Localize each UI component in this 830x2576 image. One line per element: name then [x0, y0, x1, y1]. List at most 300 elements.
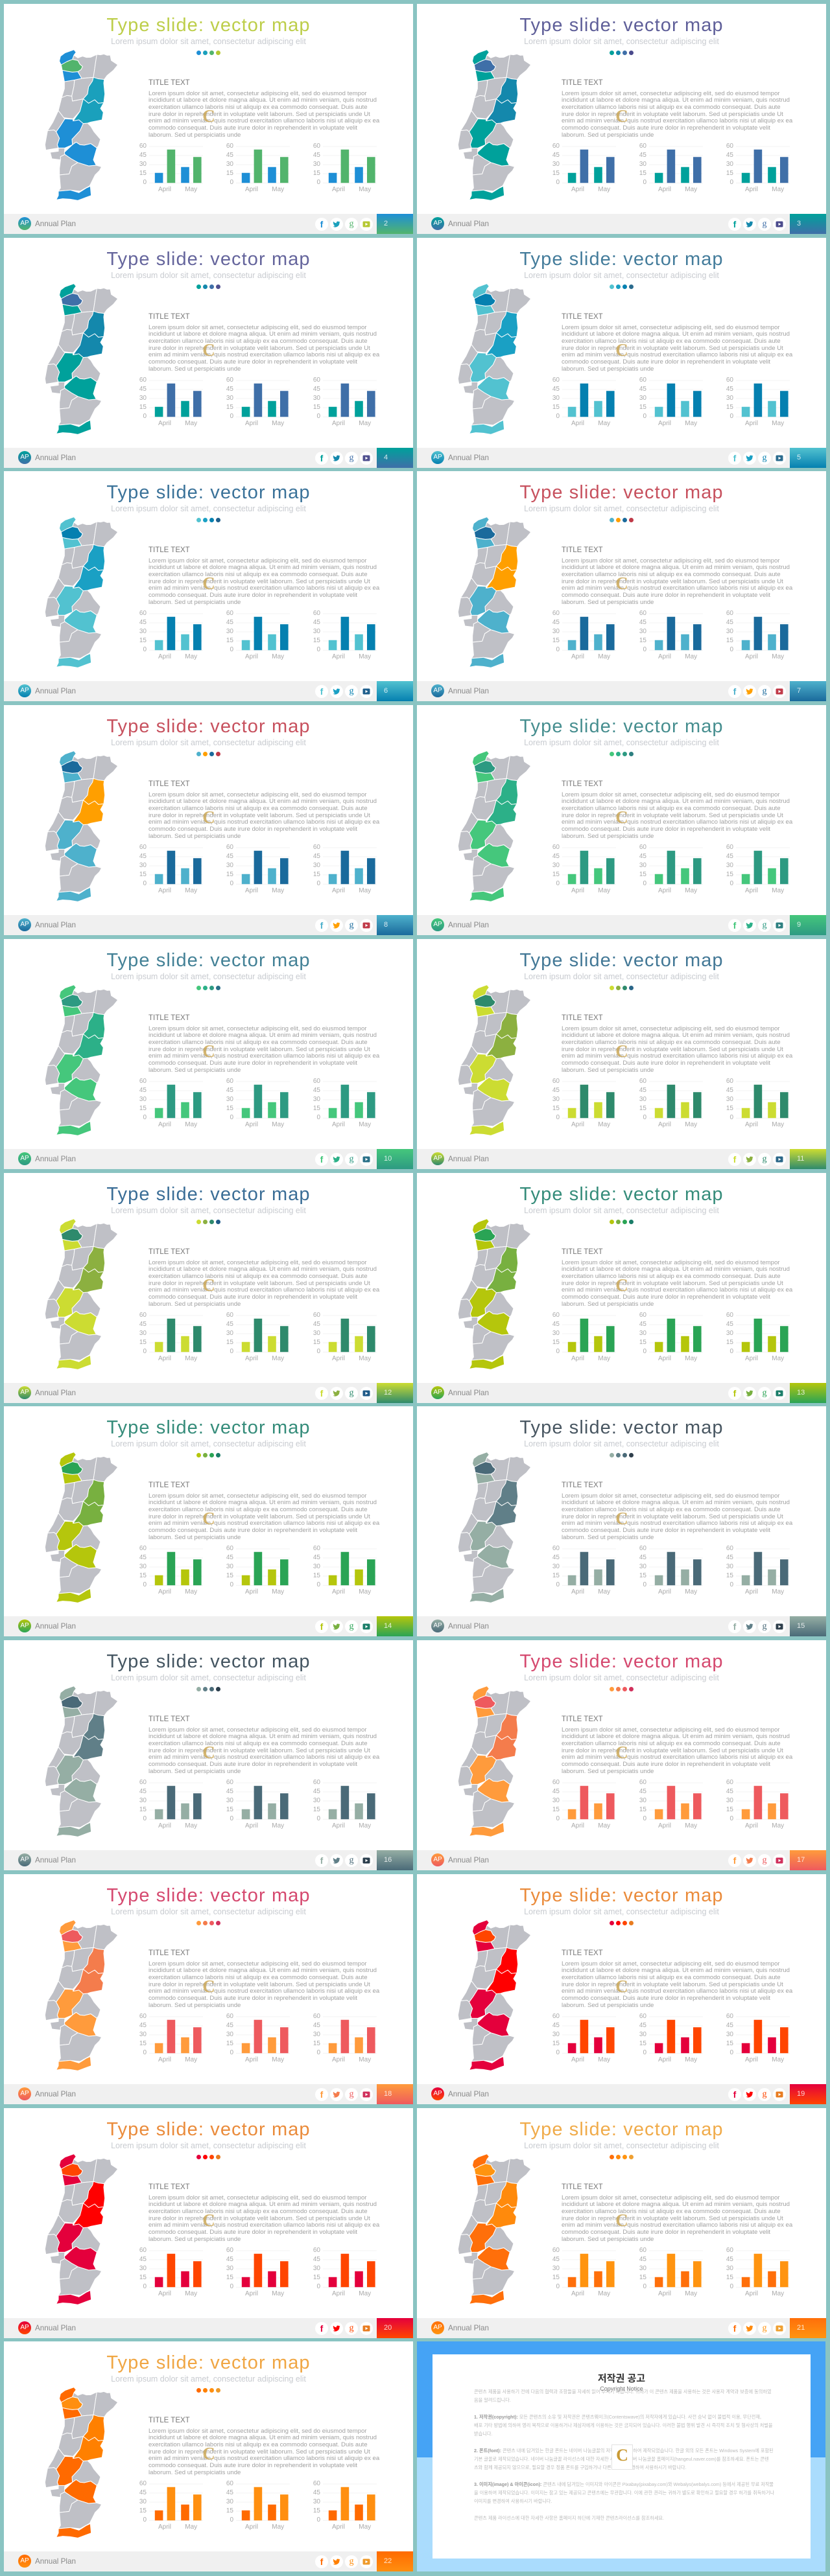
icon: twitter: [330, 2088, 343, 2101]
bar chart 3: April: [332, 420, 345, 427]
icon: facebook: [728, 685, 741, 698]
bar chart 3: 30: [313, 1797, 320, 1804]
logo: [18, 2087, 31, 2100]
bar chart 1: May: [185, 420, 197, 427]
subtitle: Lorem ipsum dolor sit amet, consectetur adipiscing elit: [111, 972, 306, 981]
icon: google: [345, 685, 358, 698]
icon: facebook: f: [733, 1855, 736, 1866]
icon: twitter: [330, 685, 343, 698]
body text: commodo consequat. Duis aute irure dolor in reprehenderit in voluptate velit: [148, 1527, 357, 1534]
body text: exercitation ullamco laboris nisi ut aliquip ex ea commodo consequat. Duis aute: [562, 1506, 781, 1513]
icon: youtube: [773, 919, 786, 932]
dots: [610, 1687, 634, 1691]
bar chart 3: 60: [313, 1779, 320, 1786]
bar chart 3: May: [772, 653, 784, 660]
icon: google: [758, 685, 771, 698]
bar chart 3: [313, 1078, 384, 1130]
brand: Annual Plan: [35, 2090, 76, 2098]
body text: exercitation ullamco laboris nisi ut aliquip ex ea commodo consequat. Duis aute: [562, 104, 781, 111]
bar chart 1: [552, 143, 616, 193]
body text: incididunt ut labore et dolore magna aliqua. Ut enim ad minim veniam, quis nostrud: [148, 1266, 377, 1273]
bar chart 1: [139, 1545, 210, 1597]
bar chart 1: 60: [139, 2480, 147, 2487]
map: [439, 1909, 543, 2091]
text: image clause: 3. 이미지(image) & 아이콘(icon): 콘텐츠 내에 담겨있는 이미지와 아이콘은 Pixabay(pixabay.com)와 Webalys(webalys.com) 등에서 제공된 무료 저작물: [474, 2481, 774, 2487]
subtitle: Lorem ipsum dolor sit amet, consectetur adipiscing elit: [111, 1907, 306, 1916]
icon: youtube: [773, 2088, 786, 2101]
bar chart 1: 30: [552, 1330, 560, 1337]
title: Type slide: vector map: [519, 950, 724, 971]
bar chart 1: 60: [139, 1312, 147, 1319]
bar chart 1: 15: [552, 1806, 560, 1813]
body text: exercitation ullamco laboris nisi ut aliquip ex ea commodo consequat. Duis aute: [148, 805, 368, 812]
icon: google: g: [763, 2089, 766, 2099]
bar chart 2: 45: [226, 1788, 233, 1795]
heading: TITLE TEXT: [562, 313, 603, 321]
logo: AP: [433, 1155, 442, 1162]
icon: google: g: [763, 920, 766, 930]
body text: exercitation ullamco laboris nisi ut aliquip ex ea commodo consequat. Duis aute: [148, 1273, 368, 1280]
bar chart 2: 30: [226, 161, 233, 168]
subtitle: Lorem ipsum dolor sit amet, consectetur adipiscing elit: [524, 271, 719, 280]
page number: [377, 214, 413, 234]
bar chart 3: 45: [313, 1087, 320, 1094]
body text: irure dolor in reprehenderit in voluptate velit laborum. Sed ut perspiciatis unde Ut: [148, 1747, 370, 1754]
page number: 21: [797, 2324, 805, 2332]
bar chart 3: May: [359, 2290, 371, 2297]
bar chart 2: [639, 1545, 710, 1597]
bar chart 1: 45: [139, 1554, 147, 1561]
bar chart 3: 45: [726, 1554, 733, 1561]
bar chart 3: 30: [726, 2031, 733, 2038]
body text: incididunt ut labore et dolore magna aliqua. Ut enim ad minim veniam, quis nostrud: [562, 1733, 790, 1740]
bar chart 1: 0: [143, 1815, 147, 1822]
icon: facebook: f: [733, 219, 736, 229]
subtitle: Lorem ipsum dolor sit amet, consectetur adipiscing elit: [524, 1439, 719, 1448]
bar chart 1: [552, 1078, 623, 1130]
icon: facebook: f: [320, 1621, 323, 1632]
panel: slide 16: [4, 1640, 413, 1870]
bar chart 1: May: [185, 653, 197, 660]
bar chart 3: 0: [316, 2283, 320, 2290]
bar chart 1: 0: [556, 2283, 560, 2290]
bar chart 1: May: [185, 1588, 197, 1595]
bar chart 2: May: [685, 1121, 697, 1128]
bar chart 3: [313, 610, 384, 662]
icon: facebook: f: [320, 686, 323, 697]
body text: commodo consequat. Duis aute irure dolor in reprehenderit in voluptate velit: [562, 2229, 770, 2236]
bar chart 1: May: [598, 1355, 610, 1362]
bar chart 2: 45: [639, 853, 646, 860]
subtitle: Lorem ipsum dolor sit amet, consectetur adipiscing elit: [524, 1673, 719, 1682]
subtitle: Lorem ipsum dolor sit amet, consectetur adipiscing elit: [111, 2374, 306, 2384]
icon: youtube: [773, 452, 786, 465]
bar chart 3: May: [772, 420, 784, 427]
bar chart 2: April: [658, 420, 671, 427]
bar chart 2: 15: [639, 170, 646, 177]
logo: AP: [433, 921, 442, 928]
icon: facebook: [728, 919, 741, 932]
text: intro: 콘텐츠 제품을 사용하기 전에 다음의 협력과 조항들을 자세히 읽어 주시기 바랍니다. 귀하가 이 콘텐츠 제품을 사용하는 것은 사용자 계약과 보증에 동의하였: [474, 2389, 772, 2395]
bar chart 1: [552, 1779, 623, 1831]
bar chart 3: [313, 2013, 384, 2065]
bar chart 2: 60: [639, 1312, 646, 1319]
bar chart 2: 30: [226, 2498, 233, 2505]
body text: laborum. Sed ut perspiciatis unde: [148, 1301, 241, 1308]
brand: Annual Plan: [35, 454, 76, 462]
bar chart 3: 15: [313, 1339, 320, 1346]
bar chart 1: May: [598, 186, 610, 193]
body text: laborum. Sed ut perspiciatis unde: [148, 2002, 241, 2009]
heading: TITLE TEXT: [148, 546, 190, 554]
watermark: C: [202, 1743, 215, 1762]
bar chart 1: April: [571, 653, 584, 660]
bar chart 1: 60: [139, 1545, 147, 1552]
bar chart 1: 60: [552, 2013, 560, 2020]
bar chart 1: 30: [552, 862, 560, 869]
bar chart 2: April: [658, 186, 671, 193]
subtitle: Lorem ipsum dolor sit amet, consectetur adipiscing elit: [111, 1673, 306, 1682]
brand: Annual Plan: [448, 454, 489, 462]
footer: [417, 1850, 826, 1870]
page number: 6: [384, 687, 388, 695]
watermark: C: [615, 574, 628, 593]
bar chart 3: April: [332, 186, 345, 193]
page number: 3: [797, 220, 801, 227]
icon: facebook: [315, 2322, 328, 2335]
bar chart 1: May: [185, 2290, 197, 2297]
bar chart 2: May: [685, 420, 697, 427]
bar chart 2: 15: [639, 1339, 646, 1346]
bar chart 2: [226, 610, 290, 660]
body text: incididunt ut labore et dolore magna aliqua. Ut enim ad minim veniam, quis nostrud: [148, 97, 377, 104]
bar chart 1: 30: [139, 628, 147, 635]
map: [439, 1675, 543, 1857]
logo: [18, 1152, 31, 1165]
bar chart 3: 15: [726, 1806, 733, 1813]
bar chart 1: April: [571, 1588, 584, 1595]
page number: [790, 681, 826, 701]
title: Type slide: vector map: [106, 2352, 311, 2373]
dots: [610, 752, 634, 756]
bar chart 1: May: [185, 1355, 197, 1362]
bar chart 2: 45: [639, 2022, 646, 2029]
body text: laborum. Sed ut perspiciatis unde: [562, 1768, 654, 1775]
bar chart 2: 0: [230, 2283, 233, 2290]
icon: twitter: [743, 1153, 756, 1166]
dots: [610, 51, 634, 55]
bar chart 2: 30: [639, 1330, 646, 1337]
logo: [18, 1619, 31, 1632]
page number: 14: [384, 1622, 392, 1630]
footer: [417, 2318, 826, 2338]
icon: facebook: [315, 919, 328, 932]
bar chart 3: May: [772, 1355, 784, 1362]
bar chart 3: 15: [313, 871, 320, 878]
bar chart 2: 60: [639, 377, 646, 384]
bar chart 1: 45: [139, 619, 147, 626]
bar chart 3: April: [745, 1355, 758, 1362]
map: [458, 284, 530, 434]
page number: [790, 915, 826, 935]
icon: google: [758, 1854, 771, 1867]
icon: youtube: [360, 1387, 373, 1400]
dots: [196, 1220, 220, 1224]
body text: incididunt ut labore et dolore magna aliqua. Ut enim ad minim veniam, quis nostrud: [148, 1032, 377, 1039]
bar chart 2: 60: [226, 1779, 233, 1786]
bar chart 2: 60: [226, 844, 233, 851]
logo: AP: [433, 687, 442, 694]
title: Type slide: vector map: [106, 715, 311, 736]
bar chart 3: 45: [313, 2256, 320, 2263]
bar chart 2: 0: [643, 1114, 646, 1121]
bar chart 1: 30: [552, 628, 560, 635]
icon: google: g: [349, 1855, 354, 1865]
bar chart 1: 45: [552, 2256, 560, 2263]
bar chart 3: [726, 1078, 797, 1130]
bar chart 1: 45: [139, 2489, 147, 2496]
bar chart 3: 30: [313, 1563, 320, 1570]
body text: enim ad minim veniam, quis nostrud exercitation ullamco laboris nisi ut aliquip ex ea: [562, 1520, 792, 1527]
logo: [431, 684, 444, 697]
bar chart 3: April: [745, 1822, 758, 1829]
logo: [431, 451, 444, 464]
bar chart 2: April: [658, 1822, 671, 1829]
dots: [196, 1921, 220, 1925]
bar chart 1: April: [158, 887, 171, 894]
body text: Lorem ipsum dolor sit amet, consectetur adipiscing elit, sed do eiusmod tempor: [562, 1492, 779, 1500]
icon: facebook: [728, 1153, 741, 1166]
bar chart 2: May: [272, 887, 284, 894]
bar chart 3: 0: [316, 2049, 320, 2056]
heading: TITLE TEXT: [148, 1949, 190, 1957]
icon: google: g: [349, 1621, 354, 1631]
body text: enim ad minim veniam, quis nostrud exercitation ullamco laboris nisi ut aliquip ex ea: [562, 117, 792, 124]
watermark: C: [202, 807, 215, 827]
body text: irure dolor in reprehenderit in voluptate velit laborum. Sed ut perspiciatis unde Ut: [562, 111, 783, 118]
bar chart 3: 30: [726, 1096, 733, 1103]
page number: 12: [384, 1389, 392, 1397]
heading: TITLE TEXT: [148, 2183, 190, 2191]
bar chart 1: 60: [552, 610, 560, 617]
body text: Lorem ipsum dolor sit amet, consectetur adipiscing elit, sed do eiusmod tempor: [148, 1960, 366, 1967]
bar chart 3: [726, 1779, 797, 1831]
bar chart 3: 15: [726, 2274, 733, 2281]
bar chart 2: May: [272, 2056, 284, 2063]
footer: [4, 2318, 413, 2338]
bar chart 2: 60: [639, 1078, 646, 1085]
panel: slide 6: [4, 471, 413, 701]
logo: AP: [433, 454, 442, 461]
bar chart 3: 60: [726, 1078, 733, 1085]
body text: enim ad minim veniam, quis nostrud exercitation ullamco laboris nisi ut aliquip ex ea: [148, 585, 379, 592]
map: [439, 974, 543, 1155]
bar chart 3: 60: [726, 2013, 733, 2020]
page number: [790, 2318, 826, 2338]
body text: irure dolor in reprehenderit in voluptate velit laborum. Sed ut perspiciatis unde Ut: [148, 1280, 370, 1287]
bar chart 1: May: [185, 1822, 197, 1829]
bar chart 2: April: [658, 1588, 671, 1595]
bar chart 1: 60: [552, 143, 560, 150]
bar chart 1: May: [598, 887, 610, 894]
subtitle: Lorem ipsum dolor sit amet, consectetur adipiscing elit: [524, 1206, 719, 1215]
bar chart 2: 15: [639, 871, 646, 878]
panel: slide 22: [4, 2341, 413, 2571]
bar chart 3: May: [359, 653, 371, 660]
page number: 9: [797, 921, 801, 929]
bar chart 2: 0: [230, 413, 233, 420]
icon: twitter: [743, 2322, 756, 2335]
body text: [562, 1493, 792, 1541]
bar chart 2: 0: [643, 1348, 646, 1355]
brand: Annual Plan: [448, 1622, 489, 1630]
bar chart 3: [313, 844, 384, 896]
icon: google: g: [349, 2089, 354, 2099]
body text: [562, 1961, 792, 2009]
bar chart 3: 0: [316, 1114, 320, 1121]
bar chart 1: 15: [139, 637, 147, 644]
logo: AP: [433, 2324, 442, 2331]
bar chart 3: 0: [729, 1114, 733, 1121]
icon: twitter: [330, 218, 343, 231]
bar chart 1: 15: [139, 2507, 147, 2514]
bar chart 3: 0: [316, 646, 320, 653]
page number: [377, 915, 413, 935]
bar chart 1: 60: [139, 2013, 147, 2020]
icon: facebook: f: [733, 920, 736, 931]
page number: 8: [384, 921, 388, 929]
bar chart 1: 30: [552, 2265, 560, 2272]
bar chart 1: 0: [143, 413, 147, 420]
bar chart 2: 0: [230, 646, 233, 653]
bar chart 1: 15: [552, 1339, 560, 1346]
body text: enim ad minim veniam, quis nostrud exercitation ullamco laboris nisi ut aliquip ex ea: [562, 1286, 792, 1294]
page number: [377, 2084, 413, 2104]
logo: AP: [20, 1622, 29, 1629]
body text: laborum. Sed ut perspiciatis unde: [148, 366, 241, 373]
bar chart 3: 60: [726, 1312, 733, 1319]
icon: google: g: [763, 1621, 766, 1631]
page number: 4: [384, 454, 388, 461]
bar chart 1: 45: [139, 853, 147, 860]
bar chart 3: 45: [726, 1321, 733, 1328]
bar chart 2: 0: [643, 1815, 646, 1822]
body text: Lorem ipsum dolor sit amet, consectetur adipiscing elit, sed do eiusmod tempor: [562, 2194, 779, 2201]
body text: laborum. Sed ut perspiciatis unde: [148, 1067, 241, 1074]
bar chart 2: [226, 143, 290, 193]
bar chart 1: April: [158, 1588, 171, 1595]
text: copyright clause: [474, 2413, 773, 2438]
page number: 19: [797, 2090, 805, 2098]
page number: 11: [797, 1155, 804, 1163]
bar chart 3: 30: [726, 395, 733, 402]
bar chart 1: May: [185, 887, 197, 894]
icon: google: g: [349, 219, 354, 229]
bar chart 2: [226, 2013, 297, 2065]
body text: enim ad minim veniam, quis nostrud exercitation ullamco laboris nisi ut aliquip ex ea: [562, 351, 792, 358]
body text: irure dolor in reprehenderit in voluptate velit laborum. Sed ut perspiciatis unde Ut: [148, 2448, 370, 2455]
watermark: C: [202, 574, 215, 593]
icon: youtube: [360, 1620, 373, 1633]
map: [439, 2143, 543, 2325]
bar chart 3: May: [359, 186, 371, 193]
heading: TITLE TEXT: [148, 1248, 190, 1256]
dots: [196, 1453, 220, 1457]
subtitle: Lorem ipsum dolor sit amet, consectetur adipiscing elit: [111, 738, 306, 747]
body text: Lorem ipsum dolor sit amet, consectetur adipiscing elit, sed do eiusmod tempor: [562, 1960, 779, 1967]
bar chart 1: [139, 610, 203, 660]
icon: twitter: [330, 1854, 343, 1867]
bar chart 3: May: [772, 186, 784, 193]
page number: [790, 1149, 826, 1169]
bar chart 1: [139, 1779, 210, 1831]
map: [439, 506, 543, 688]
bar chart 3: 30: [726, 1797, 733, 1804]
bar chart 2: 60: [226, 2013, 233, 2020]
bar chart 2: 30: [226, 395, 233, 402]
brand: Annual Plan: [35, 687, 76, 695]
text: copyright clause: 받습니다.: [474, 2431, 492, 2437]
icon: youtube: [773, 1387, 786, 1400]
bar chart 1: 15: [139, 404, 147, 411]
bar chart 1: 60: [139, 377, 147, 384]
icon: twitter: [330, 2555, 343, 2568]
title: Type slide: vector map: [106, 1183, 311, 1204]
map: [45, 50, 117, 200]
page number: [790, 1383, 826, 1403]
icon: youtube: [360, 452, 373, 465]
bar chart 1: 30: [552, 161, 560, 168]
bar chart 3: 60: [726, 143, 733, 150]
bar chart 2: [226, 377, 290, 427]
page number: [377, 448, 413, 468]
bar chart 3: 30: [313, 2031, 320, 2038]
bar chart 2: May: [272, 1121, 284, 1128]
map: [458, 50, 530, 200]
watermark: C: [615, 1041, 628, 1061]
body text: exercitation ullamco laboris nisi ut aliquip ex ea commodo consequat. Duis aute: [148, 104, 368, 111]
panel: slide 10: [4, 939, 413, 1169]
title: Type slide: vector map: [106, 249, 311, 270]
bar chart 2: 45: [226, 2489, 233, 2496]
body text: Lorem ipsum dolor sit amet, consectetur adipiscing elit, sed do eiusmod tempor: [148, 90, 366, 97]
icon: facebook: f: [320, 2323, 323, 2334]
body text: incididunt ut labore et dolore magna aliqua. Ut enim ad minim veniam, quis nostrud: [148, 564, 377, 571]
logo: AP: [20, 1856, 29, 1863]
bar chart 3: 45: [726, 853, 733, 860]
bar chart 1: [552, 2247, 623, 2299]
icon: google: [758, 218, 771, 231]
bar chart 1: April: [158, 1822, 171, 1829]
body text: incididunt ut labore et dolore magna aliqua. Ut enim ad minim veniam, quis nostrud: [562, 564, 790, 571]
body text: enim ad minim veniam, quis nostrud exercitation ullamco laboris nisi ut aliquip ex ea: [148, 2455, 379, 2462]
heading: TITLE TEXT: [148, 79, 190, 87]
title: Type slide: vector map: [519, 2119, 724, 2140]
bar chart 2: 15: [639, 1105, 646, 1112]
bar chart 1: [139, 844, 210, 896]
bar chart 2: 0: [643, 880, 646, 887]
bar chart 3: 15: [313, 1572, 320, 1579]
heading: notice title: 저작권 공고: [598, 2373, 645, 2384]
bar chart 1: April: [571, 1822, 584, 1829]
bar chart 3: 45: [726, 2022, 733, 2029]
body text: laborum. Sed ut perspiciatis unde: [148, 599, 241, 606]
body text: incididunt ut labore et dolore magna aliqua. Ut enim ad minim veniam, quis nostrud: [148, 1733, 377, 1740]
bar chart 1: [139, 377, 203, 427]
panel: slide 9: [417, 705, 826, 935]
heading: TITLE TEXT: [562, 1014, 603, 1022]
icon: facebook: [728, 2088, 741, 2101]
